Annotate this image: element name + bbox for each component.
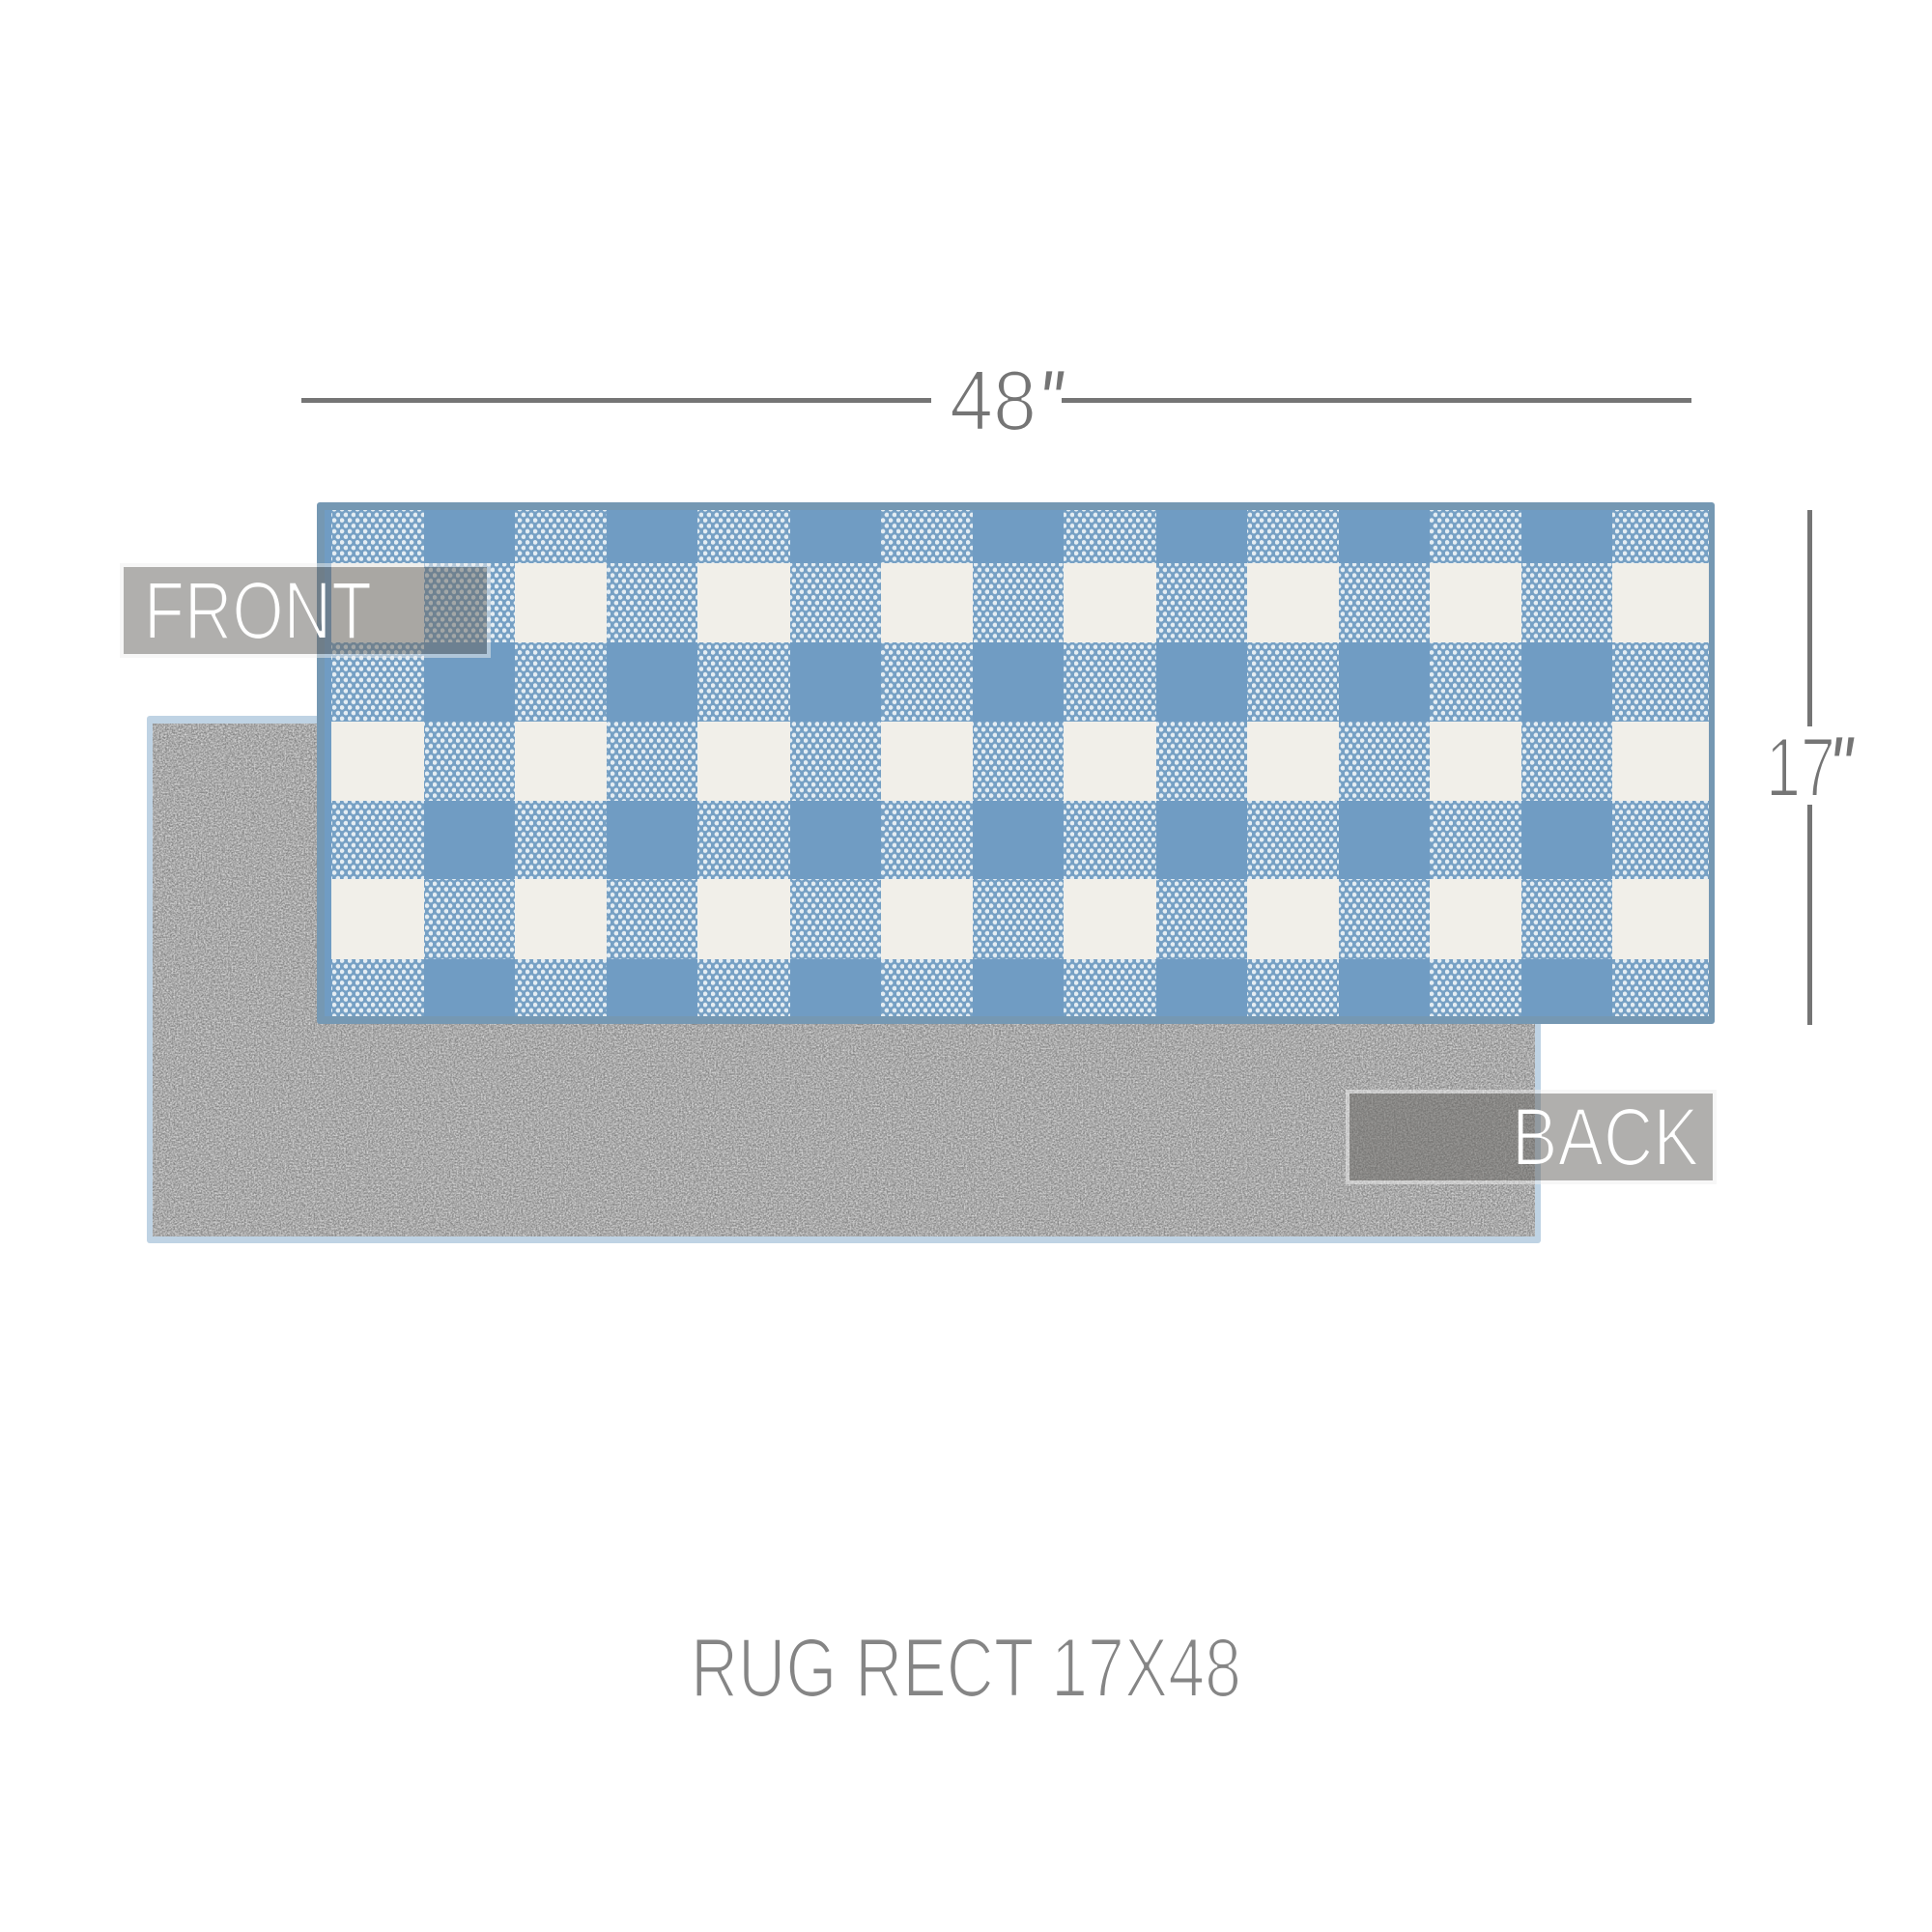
width dimension: 48 inches: 48 (950, 353, 1037, 448)
label: BACK (1348, 1092, 1715, 1182)
cream base (325, 510, 1709, 1016)
height dimension: 17 inches: 17 (1766, 722, 1835, 814)
width dimension: 48 inches (301, 353, 1691, 448)
label: BACK: BACK (1512, 1092, 1699, 1182)
label: FRONT: FRONT (144, 565, 372, 656)
dotted horizontal bands (325, 510, 1709, 1016)
title: RUG RECT 17X48 (691, 1622, 1241, 1715)
rug binding edge (317, 502, 1715, 1024)
height dimension: 17 inches: " (1829, 719, 1855, 814)
panel: front of rug, buffalo check (317, 502, 1715, 1024)
left edge band of the first column (325, 510, 331, 1016)
height dimension: 17 inches (1766, 510, 1855, 1025)
solid blue squares (424, 510, 1612, 1016)
width dimension: 48 inches: " (1038, 353, 1065, 448)
dotted vertical bands (424, 510, 1612, 1016)
panel: back of rug (147, 716, 1541, 1243)
